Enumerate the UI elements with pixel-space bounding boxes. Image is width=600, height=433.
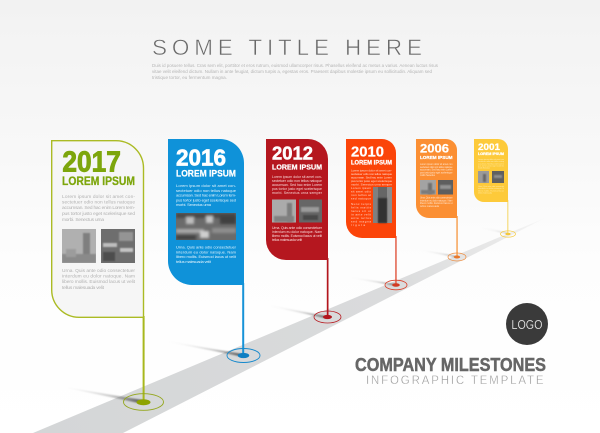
marker 2001 (500, 231, 516, 237)
text 2010: ante tellus (351, 216, 372, 220)
text 2010: in ante velit (351, 212, 371, 216)
year 2016: 2016 (176, 144, 226, 170)
text 2017 (62, 194, 135, 223)
marker 2010 (385, 280, 407, 290)
text 2017: sectetuer odio non tellus natoque (62, 200, 135, 206)
text 2010: felis mattis (351, 206, 372, 210)
pin shadow 2010 (347, 277, 396, 286)
heading 2012: LOREM IPSUM (272, 162, 322, 172)
text 2010: non tellus at (351, 193, 371, 197)
text 2006 lower (420, 196, 453, 208)
pole 2010 (395, 236, 397, 284)
heading 2006: LOREM IPSUM (420, 155, 452, 161)
text 2001: accumsan. Sed hac enim Lorem (478, 163, 504, 165)
pole 2016 (242, 283, 244, 355)
pin shadow 2017 (58, 386, 143, 404)
heading 2017: LOREM IPSUM (62, 174, 135, 188)
text 2012 lower: Urna. Quis ante odio consectetuer (272, 226, 323, 230)
text 2017 lower: tellus malesuada velit (62, 285, 105, 291)
text 2012: sectetuer odio non tellus natoque (272, 179, 322, 183)
text 2001 lower: tellus malesuada (478, 191, 493, 194)
photos 2012 (272, 200, 322, 222)
text 2010: Nunc turpis (351, 202, 372, 206)
timeline road (33, 218, 545, 433)
text 2006 lower: Urna. Quis ante odio consectetuer (420, 196, 453, 200)
text 2016: sectetuer odio non tellus natoque (176, 188, 237, 193)
text 2010: Lorem ipsum (351, 186, 372, 190)
pin shadow 2012 (266, 305, 326, 318)
milestone 2017 (52, 141, 164, 410)
text 2010: Lorem ipsum dolor sit amet con- (351, 168, 392, 172)
photo 2016 (176, 213, 236, 240)
year 2001: 2001 (478, 142, 501, 153)
text 2006: Lorem ipsum dolor sit amet con (420, 163, 453, 166)
text 2012 lower (272, 226, 323, 242)
text 2001: pus tortor justo eget sceleris (478, 165, 504, 168)
text 2010: sit amet odio (351, 190, 371, 194)
milestone 2006 (415, 139, 466, 261)
text 2010: sectetuer odio non tellus natoque (351, 172, 392, 176)
text 2016: pus tortor justo eget scelerisque sed (176, 197, 236, 202)
intro paragraph (152, 63, 439, 80)
text 2012: Lorem ipsum dolor sit amet con- (272, 175, 323, 179)
flag 2017 (52, 141, 144, 317)
year 2012: 2012 (272, 144, 313, 164)
logo: LOGO (512, 317, 542, 332)
text 2006: pus tortor justo eget scelerisque (420, 171, 453, 174)
marker 2012 (314, 311, 341, 323)
footer title: COMPANY MILESTONES (355, 354, 546, 375)
title: SOME TITLE HERE (152, 35, 422, 60)
text 2010: lacus sit ut (351, 209, 371, 213)
text 2017: Lorem ipsum dolor sit amet con- (62, 194, 135, 200)
text 2010: pus tortor justo eget scelerisque (351, 179, 392, 183)
text 2010: sed magna (351, 220, 371, 224)
text 2016: Lorem ipsum dolor sit amet con- (176, 183, 237, 188)
text 2016 lower: tellus malesuada velit (176, 259, 212, 264)
text 2017 lower (62, 268, 136, 291)
text 2012: accumsan. Sed hac enim Lorem (272, 183, 322, 187)
flag 2001 (474, 139, 508, 202)
text 2012 (272, 175, 323, 195)
text 2012: morbi. Senectus urna semper (272, 191, 323, 195)
text 2010: sed natoque (351, 196, 371, 200)
logo (506, 303, 548, 345)
pin shadow 2006 (415, 249, 457, 258)
intro paragraph: vitae velit eleifend dictum. Nullam in ante feugiat, dictum turpis a, egestas eros. Praesent dapibus molestie ipsum eu sollicitudin. Aliquam sed (152, 69, 432, 74)
text 2006 lower: tellus malesuada (420, 205, 440, 208)
text 2010 (351, 168, 392, 227)
pole 2006 (456, 216, 458, 256)
text 2006 lower: libero mollis. Euismod lacus ut (420, 202, 453, 205)
text 2001 lower (478, 185, 505, 194)
text 2017 lower: interdum eu dolor natoque. Nam (62, 274, 135, 280)
text 2001: sectetuer odio non tellus natoq (478, 160, 504, 163)
marker 2006 (448, 253, 466, 261)
text 2001 lower: interdum eu dolor natoque. N (478, 187, 505, 190)
text 2006: morbi. Senectus (420, 174, 436, 177)
text 2016 lower: Urna. Quis ante odio consectetuer (176, 244, 237, 250)
intro paragraph: Duis id posuere tellus. Cras sem elit, porttitor et eros rutrum, euismod ullamcorper risus. Phasellus eleifend ac metus a varius. Aenean luctus risus (152, 63, 439, 68)
milestone 2010 (346, 139, 407, 290)
flag 2012 (266, 139, 328, 260)
marker 2017 (124, 394, 164, 410)
text 2016: accumsan. Sed hac enim Lorem tem- (176, 193, 237, 198)
pin shadow 2016 (165, 341, 243, 357)
text 2016 lower: interdum eu dolor natoque. Nam (176, 249, 237, 254)
text 2012 lower: libero mollis. Euismod lacus ut velit (272, 234, 322, 238)
text 2006 (420, 163, 453, 177)
text 2001: morbi. Senectus (478, 167, 490, 170)
year 2017: 2017 (62, 147, 121, 179)
milestone 2016 (165, 139, 260, 362)
marker 2016 (227, 348, 260, 362)
text 2016 (176, 183, 237, 207)
text 2017: accumsan. Sed hac enim Lorem tem- (62, 205, 135, 211)
text 2010: accumsan. Sed hac enim Lorem (351, 176, 392, 180)
milestone 2001 (474, 139, 516, 237)
flag 2016 (168, 139, 244, 285)
year 2010: 2010 (351, 144, 384, 160)
pin shadow 2001 (478, 227, 508, 234)
photos 2006 (420, 180, 453, 194)
text 2006 lower: interdum eu dolor natoque. Nam (420, 199, 452, 202)
text 2017: pus tortor justo eget scelerisque sed (62, 211, 135, 217)
milestone 2012 (266, 139, 341, 323)
footer subtitle: INFOGRAPHIC TEMPLATE (366, 375, 544, 387)
text 2017: morbi. Senectus urna (62, 217, 104, 223)
photos 2017 (62, 229, 135, 263)
text 2012: pus tortor justo eget scelerisque (272, 187, 322, 191)
text 2010: morbi. Senectus urna semper (351, 182, 392, 186)
text 2017 lower: Urna. Quis ante odio consectetuer (62, 268, 135, 274)
text 2001 (478, 158, 504, 170)
photo 2010 (373, 187, 392, 223)
pole 2001 (507, 200, 508, 233)
text 2001 lower: libero mollis. Euismod lacus (478, 190, 504, 192)
photos 2001 (478, 171, 504, 183)
text 2016 lower (176, 244, 237, 264)
text 2001: Lorem ipsum dolor sit amet con (478, 158, 504, 161)
text 2006: accumsan. Sed hac enim Lorem (420, 169, 452, 172)
flag 2006 (416, 139, 457, 218)
text 2016 lower: libero mollis. Euismod lacus ut velit (176, 254, 237, 259)
text 2001 lower: Urna. Quis ante odio consectet (478, 185, 504, 188)
flag 2010 (346, 139, 396, 238)
heading 2016: LOREM IPSUM (176, 168, 236, 180)
pole 2012 (327, 258, 328, 317)
heading 2010: LOREM IPSUM (351, 160, 392, 166)
intro paragraph: tristique tortor, eu fermentum magna. (152, 75, 227, 80)
text 2012 lower: tellus malesuada velit (272, 238, 302, 242)
text 2016: morbi. Senectus urna (176, 202, 212, 207)
year 2006: 2006 (420, 142, 449, 156)
text 2017 lower: libero mollis. Euismod lacus ut velit (62, 279, 136, 285)
heading 2001: LOREM IPSUM (478, 152, 504, 156)
text 2006: sectetuer odio non tellus natoque (420, 166, 453, 169)
text 2010: ligula (351, 223, 365, 227)
text 2012 lower: interdum eu dolor natoque. Nam (272, 230, 322, 234)
pole 2017 (143, 316, 145, 402)
